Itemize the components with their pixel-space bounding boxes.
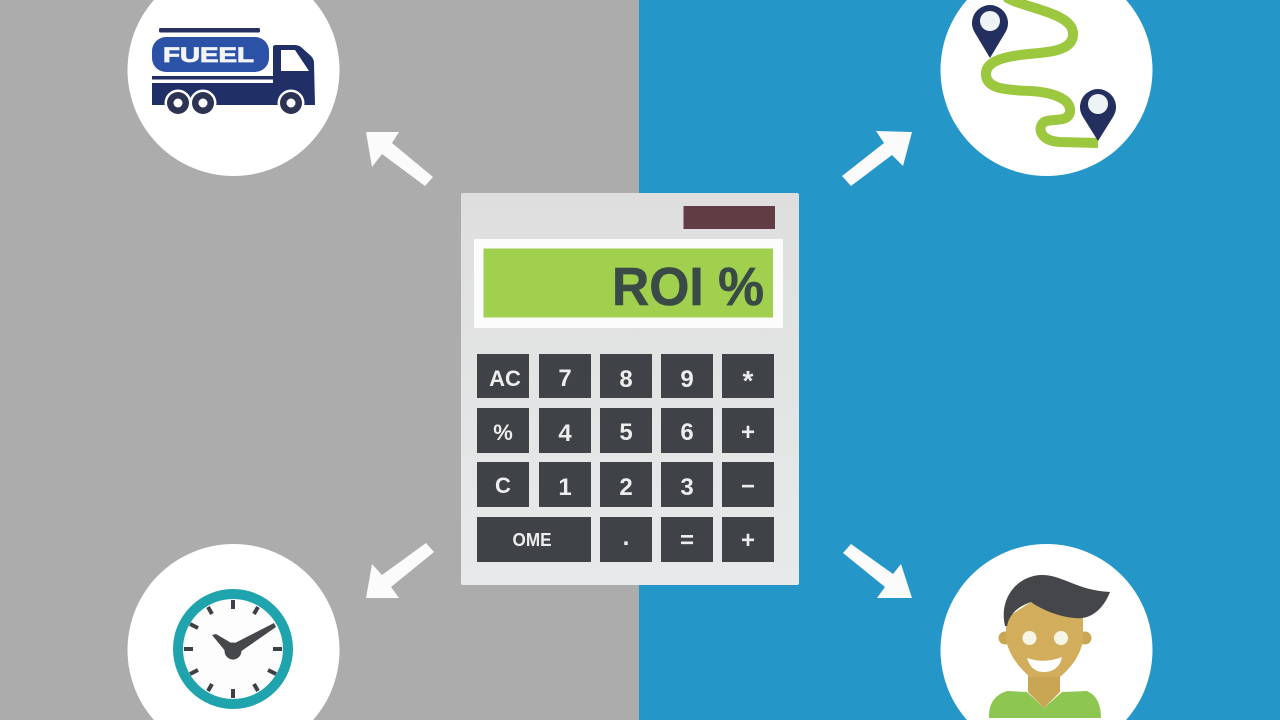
key: AC: AC — [489, 366, 521, 391]
key: 2: 2 — [619, 474, 633, 501]
key: plus lower: + — [741, 527, 755, 554]
key: C: C — [495, 473, 511, 498]
keypad — [477, 354, 774, 562]
display — [474, 239, 783, 328]
key: 7: 7 — [558, 365, 572, 392]
key: plus lower — [722, 517, 774, 562]
key: multiply — [722, 354, 774, 398]
key: percent: % — [493, 420, 513, 445]
key: 1 — [539, 462, 591, 507]
arrow: to top-right — [842, 131, 912, 186]
key: 9: 9 — [680, 366, 694, 393]
key: wide zero — [477, 517, 591, 562]
key: 3 — [661, 462, 713, 507]
key: 7 — [539, 354, 591, 398]
key: plus: + — [741, 419, 755, 446]
key: 5 — [600, 408, 652, 453]
key: 6: 6 — [680, 419, 694, 446]
display: ROI % — [612, 257, 764, 317]
key: minus: − — [741, 473, 755, 500]
arrow: to bottom-right — [843, 544, 912, 598]
key: plus — [722, 408, 774, 453]
key: 8: 8 — [619, 366, 633, 393]
truck wheels — [164, 90, 304, 116]
key: 6 — [661, 408, 713, 453]
fuel tank: FUEEL — [163, 44, 254, 67]
truck body and cab — [152, 45, 315, 105]
ears — [998, 632, 1092, 644]
fuel tank — [152, 37, 269, 72]
panel: blue right background — [639, 0, 1280, 720]
neck — [1028, 665, 1060, 708]
key: AC — [477, 354, 529, 398]
arrow: to top-left — [366, 132, 433, 186]
key: minus — [722, 462, 774, 507]
arrow: to bottom-left — [366, 543, 434, 598]
icon: fuel truck in white circle — [128, 0, 340, 176]
key: 4: 4 — [558, 420, 572, 447]
key: equals — [661, 517, 713, 562]
key: multiply: * — [743, 365, 754, 396]
key: wide zero: OME — [512, 530, 552, 550]
map pin: start — [972, 5, 1008, 58]
smile — [1027, 657, 1062, 672]
key: 5: 5 — [619, 419, 633, 446]
key: 4 — [539, 408, 591, 453]
key: 1: 1 — [558, 474, 572, 501]
solar panel — [684, 206, 775, 229]
key: 2 — [600, 462, 652, 507]
shirt — [989, 691, 1101, 718]
hair — [1004, 575, 1110, 626]
key: equals: = — [680, 527, 694, 554]
panel: gray left background — [0, 0, 639, 720]
key: percent — [477, 408, 529, 453]
icon: smiling person in white circle — [940, 544, 1152, 720]
key: C — [477, 462, 529, 507]
face — [1006, 602, 1083, 677]
eyes — [1022, 631, 1068, 645]
icon: clock in white circle — [128, 544, 340, 720]
key: decimal: . — [623, 524, 629, 551]
clock hands — [212, 623, 276, 660]
calculator — [461, 193, 799, 585]
map pin: end — [1080, 89, 1116, 141]
icon: winding route with map pins in white circle — [940, 0, 1152, 176]
clock ticks — [184, 600, 282, 698]
key: 8 — [600, 354, 652, 398]
key: 3: 3 — [680, 474, 694, 501]
key: 9 — [661, 354, 713, 398]
key: decimal — [600, 517, 652, 562]
